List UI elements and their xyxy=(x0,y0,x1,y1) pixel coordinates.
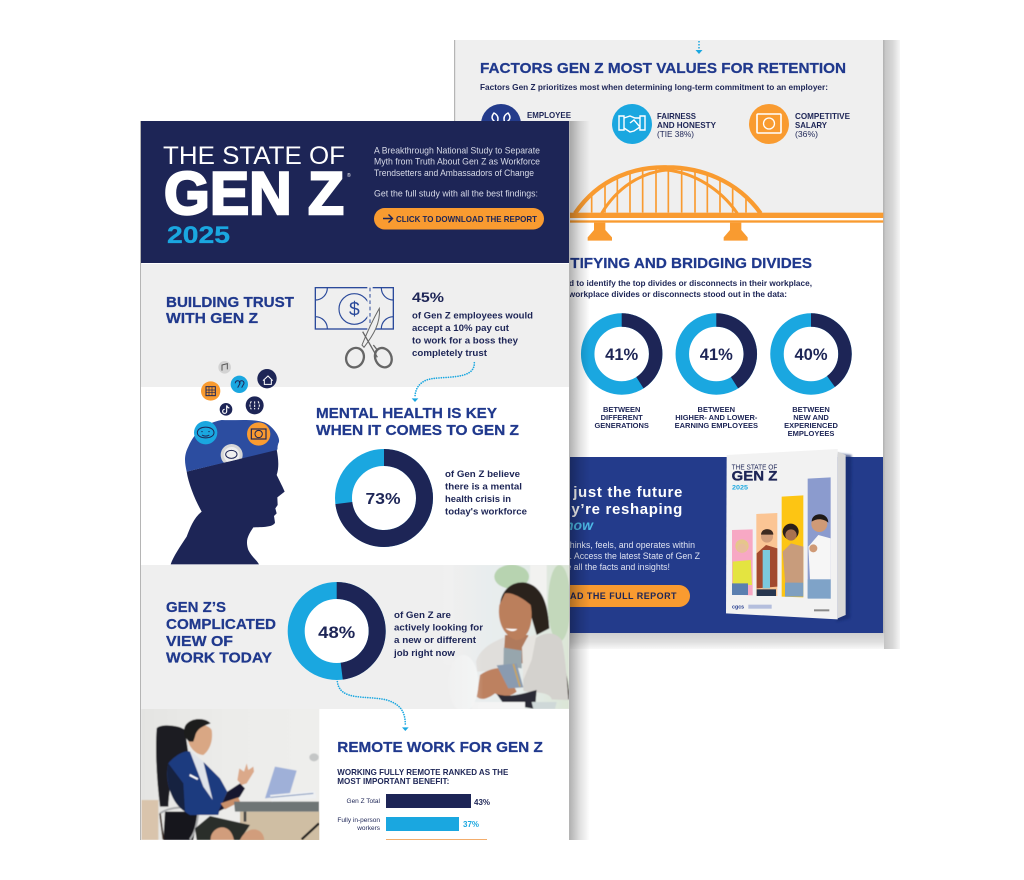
text: mental health crisis: there is a mental xyxy=(445,482,522,492)
icon: cut dollar bill and scissors xyxy=(315,285,395,370)
text: pay cut xyxy=(412,310,533,359)
chart: donut 40% experience xyxy=(777,320,845,438)
text: looking for new job xyxy=(393,610,483,659)
text: now: it now xyxy=(553,517,594,533)
button: download full report: DOWNLOAD THE FULL REPORT xyxy=(526,591,677,601)
title: registered mark: ® xyxy=(347,172,351,179)
chart: donut 41% earning: 41% xyxy=(700,346,733,364)
text: divides intro: and these workplace divides or disconnects stood out in the data: xyxy=(528,290,787,299)
icon: salary bill xyxy=(749,104,789,144)
chart: donut 40% experience: BETWEEN xyxy=(792,405,830,414)
text: fairness label: FAIRNESS xyxy=(657,111,696,121)
heading: building trust: BUILDING TRUST xyxy=(166,294,294,311)
heading: gen z's complicated view: WORK TODAY xyxy=(166,650,272,666)
text: looking for new job: actively looking for xyxy=(394,622,483,634)
chart: remote bars: Fully in-person xyxy=(337,817,380,824)
panel: building trust xyxy=(141,264,569,387)
panel: complicated view of work xyxy=(141,565,571,712)
chart: donut 41% earning: HIGHER- AND LOWER- xyxy=(675,413,758,422)
text: mental health crisis xyxy=(445,469,527,518)
chart: remote bars: Gen Z Total xyxy=(347,798,381,805)
heading: identifying and bridging divides: IDENTIFYING AND BRIDGING DIVIDES xyxy=(534,255,812,272)
text: fairness label: AND HONESTY xyxy=(657,120,716,130)
arrow: trust to mental health xyxy=(412,363,474,402)
heading: gen z's complicated view: COMPLICATED xyxy=(166,616,276,633)
arrow: back page top dotted xyxy=(696,41,702,54)
button: download full report xyxy=(500,585,690,607)
chart: remote bars: workers xyxy=(356,825,381,832)
chart: donut 41% generations: 41% xyxy=(605,346,639,364)
chart: remote bars xyxy=(337,794,490,840)
text: mental health crisis: today's workforce xyxy=(445,506,527,518)
text: salary label: COMPETITIVE xyxy=(795,111,850,121)
figure: man in white xyxy=(808,514,831,599)
text: future body xyxy=(464,540,701,572)
chart: donut 40% experience: EMPLOYEES xyxy=(788,429,834,438)
text: mental health crisis: health crisis in xyxy=(445,494,511,505)
heading: mental health: WHEN IT COMES TO GEN Z xyxy=(316,422,519,439)
text: salary label xyxy=(795,111,850,139)
title: gen z: GEN Z xyxy=(164,160,344,227)
illustration: report book: cgcs xyxy=(732,604,744,610)
illustration: head silhouette xyxy=(171,420,285,564)
button: download report: CLICK TO DOWNLOAD THE REPORT xyxy=(396,214,538,224)
panel: back infographic page xyxy=(453,40,900,649)
heading: gen z's complicated view: GEN Z’S xyxy=(166,599,226,616)
chart: remote bars: 43% xyxy=(474,798,490,807)
chart: donut 73%: 73% xyxy=(366,491,400,508)
chart: donut 73% xyxy=(344,458,424,538)
figure: woman in yellow xyxy=(732,539,752,595)
figure: man with glasses xyxy=(757,529,777,596)
chart: donut 41% earning: BETWEEN xyxy=(698,405,735,414)
chart: donut 41% generations: DIFFERENT xyxy=(601,413,643,422)
chart: donut 40% experience: EXPERIENCED xyxy=(784,421,838,430)
chart: donut 41% generations xyxy=(588,320,656,430)
chart: donut 41% generations: BETWEEN xyxy=(603,405,640,414)
chart: donut 40% experience: NEW AND xyxy=(793,413,829,422)
text: looking for new job: job right now xyxy=(393,648,456,659)
text: pay cut: completely trust xyxy=(412,348,488,359)
text: pay cut: to work for a boss they xyxy=(412,336,519,346)
text: mental health crisis: of Gen Z believe xyxy=(445,469,520,480)
text: future headline: Gen Z is not just the future xyxy=(474,484,683,501)
text: future body: the workplace environment. Access the latest State of Gen Z xyxy=(464,551,701,561)
text: remote subhead: WORKING FULLY REMOTE RANKED AS THE xyxy=(337,767,509,777)
text: salary label: (36%) xyxy=(795,129,818,139)
arrow: work view to remote work xyxy=(337,682,409,731)
illustration: report book: THE STATE OF xyxy=(732,464,777,471)
icons: floating social icons xyxy=(201,361,277,416)
text: future headline xyxy=(474,484,683,518)
chart: donut 40% experience: 40% xyxy=(794,346,828,364)
panel: front infographic page xyxy=(140,121,590,842)
text: remote subhead: MOST IMPORTANT BENEFIT: xyxy=(337,776,449,786)
text: looking for new job: a new or different xyxy=(394,635,477,646)
photo: smiling woman xyxy=(476,565,569,709)
title: year: 2025 xyxy=(167,222,230,249)
chart: donut 41% earning: EARNING EMPLOYEES xyxy=(675,421,758,430)
chart: donut 48%: 48% xyxy=(318,623,355,642)
text: header description: A Breakthrough National Study to Separate xyxy=(374,146,540,156)
text: factors intro: Factors Gen Z prioritizes most when determining long-term commitment to an employer: xyxy=(480,82,828,92)
panel: mental health xyxy=(141,361,569,565)
stat: 45%: 45% xyxy=(412,289,445,305)
text: future body: report to see all the facts and insights! xyxy=(522,562,670,572)
text: header description xyxy=(374,146,540,200)
heading: remote work: REMOTE WORK FOR GEN Z xyxy=(337,739,543,756)
chart: donut 48% xyxy=(296,590,377,672)
heading: factors for retention: FACTORS GEN Z MOST VALUES FOR RETENTION xyxy=(480,60,846,77)
panel: header xyxy=(141,121,569,263)
illustration: report book: GEN Z xyxy=(732,468,778,484)
text: fairness label xyxy=(657,111,716,139)
title: the state of: THE STATE OF xyxy=(163,142,345,170)
icon: employee circle xyxy=(481,104,521,144)
button: download report xyxy=(374,208,544,230)
text: fairness label: (TIE 38%) xyxy=(657,129,694,139)
text: future headline: of work, they’re reshaping xyxy=(479,501,683,518)
text: future body: See how Gen Z thinks, feels, and operates within xyxy=(504,540,695,550)
text: looking for new job: of Gen Z are xyxy=(394,610,451,621)
heading: building trust xyxy=(166,294,294,327)
photo: man at desk xyxy=(140,707,320,842)
figure: woman in tan xyxy=(783,524,803,597)
panel: remote work xyxy=(320,682,569,840)
text: header description: Trendsetters and Ambassadors of Change xyxy=(374,168,534,179)
chart: donut 41% earning xyxy=(675,320,758,430)
text: remote subhead xyxy=(337,767,509,786)
heading: gen z's complicated view xyxy=(166,599,276,666)
heading: gen z's complicated view: VIEW OF xyxy=(166,633,233,650)
text: header description: Myth from Truth About Gen Z as Workforce xyxy=(374,156,540,168)
text: header description: Get the full study with all the best findings: xyxy=(374,188,538,200)
text: divides intro xyxy=(470,279,812,299)
text: pay cut: accept a 10% pay cut xyxy=(412,323,510,334)
illustration: orange bridge xyxy=(570,165,884,241)
text: pay cut: of Gen Z employees would xyxy=(412,310,533,322)
illustration: report book: 2025 xyxy=(732,485,749,491)
text: divides intro: Gen Z workers were asked to identify the top divides or disconnects in their workplace, xyxy=(470,279,812,288)
text: salary label: SALARY xyxy=(795,120,827,130)
heading: building trust: WITH GEN Z xyxy=(166,310,258,327)
text: employee label: EMPLOYEE xyxy=(527,110,571,120)
icon: handshake xyxy=(612,104,652,144)
chart: donut 41% generations: GENERATIONS xyxy=(594,421,649,430)
icon: cut dollar bill and scissors: $ xyxy=(349,300,360,321)
heading: mental health: MENTAL HEALTH IS KEY xyxy=(316,405,497,422)
chart: remote bars: 37% xyxy=(463,820,479,829)
illustration: report book xyxy=(726,449,852,622)
heading: mental health xyxy=(316,405,519,439)
